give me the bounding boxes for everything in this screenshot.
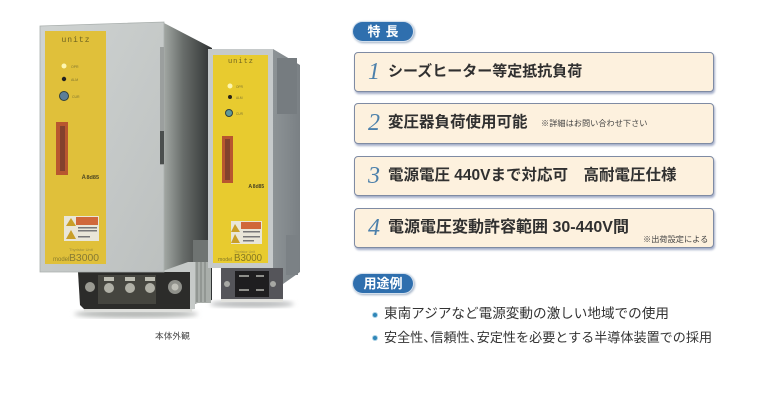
feature text 3: 電源電圧 440Vまで対応可 高耐電圧仕様	[388, 167, 677, 184]
heading: features: 特長	[367, 24, 404, 39]
large unit side panel	[164, 23, 212, 304]
small unit	[208, 49, 300, 308]
small unit side panel	[273, 49, 300, 284]
note: contact for details: ※詳細はお問い合わせ下さい	[541, 119, 647, 128]
large unit model name	[53, 247, 99, 264]
large unit indicators: ALM	[71, 78, 78, 82]
small unit front cover	[208, 49, 273, 268]
small unit logo: unitz	[228, 58, 254, 66]
small unit indicators: ALM	[236, 96, 243, 100]
large unit model name: B3000	[69, 253, 99, 264]
feature text 4: 電源電圧変動許容範囲 30-440V間	[388, 219, 629, 236]
feature text 1: シーズヒーター等定抵抗負荷	[388, 63, 582, 80]
small unit yellow panel	[213, 55, 268, 263]
small unit indicators	[226, 84, 244, 116]
small unit model name: Thyristor Unit	[234, 250, 255, 254]
large unit terminal block	[74, 262, 198, 318]
note: factory setting: ※出荷設定による	[643, 235, 708, 244]
large unit front cover	[40, 22, 164, 272]
number 4: 4	[368, 215, 380, 241]
number 1: 1	[368, 59, 380, 85]
small unit warning label	[231, 221, 262, 244]
heading: features	[353, 22, 413, 41]
number 3: 3	[368, 163, 380, 189]
small unit model name: B3000	[234, 253, 263, 264]
large unit indicators	[60, 64, 80, 100]
small unit indicators: OPR	[236, 85, 244, 89]
heading: applications	[353, 274, 413, 293]
large unit model name: Thyristor Unit	[69, 247, 94, 252]
application 1: 東南アジアなど電源変動の激しい地域での使用	[384, 306, 669, 321]
bullet 2	[372, 335, 378, 341]
bullet 1	[372, 312, 378, 318]
small unit model name: model	[218, 257, 232, 263]
feature card 3	[354, 156, 714, 196]
large unit indicators: CUR	[72, 95, 80, 99]
photo caption: 本体外観	[155, 331, 190, 341]
large unit	[40, 22, 212, 318]
feature text 2: 変圧器負荷使用可能	[388, 114, 528, 131]
large unit indicators: OPR	[71, 65, 79, 69]
application 2: 安全性、信頼性、安定性を必要とする半導体装置での採用	[384, 330, 712, 345]
number 2: 2	[368, 110, 380, 136]
small unit connector	[222, 136, 233, 183]
small unit terminal block	[210, 268, 294, 308]
large unit connector	[56, 122, 68, 175]
small unit maker mark: Ａ8d85	[248, 184, 264, 190]
large unit warning label	[64, 216, 99, 241]
large unit heat sink base	[193, 240, 211, 303]
large unit yellow panel	[45, 31, 106, 264]
application list	[372, 306, 712, 345]
product photo: two B3000 units	[40, 22, 300, 319]
large unit model name: model	[53, 257, 69, 263]
large unit maker mark: Ａ8d85	[81, 174, 99, 181]
feature card 2	[354, 103, 714, 144]
heading: applications: 用途例	[363, 276, 402, 291]
small unit indicators: CUR	[236, 112, 244, 116]
large unit logo: unitz	[61, 36, 91, 45]
small unit model name	[218, 250, 263, 264]
feature card 1	[354, 52, 714, 92]
feature card 4	[354, 208, 714, 248]
